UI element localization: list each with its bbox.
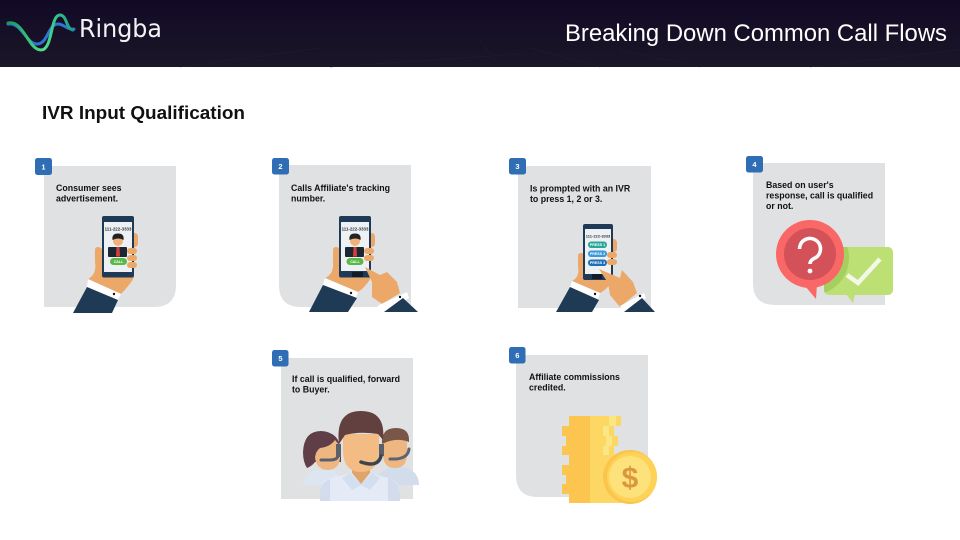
caption 3: Is prompted with an IVR: [530, 184, 631, 194]
badge 4: 4: [752, 160, 757, 169]
badge 4: [746, 156, 763, 172]
dollar coin: $: [622, 462, 639, 495]
badge 3: [509, 158, 526, 174]
caption 4: Based on user's: [766, 180, 834, 190]
badge 6: 6: [515, 351, 519, 360]
badge 2: [272, 158, 289, 174]
icon: red question speech bubble: [776, 220, 844, 299]
panel: step 4: [746, 156, 893, 305]
caption 4: response, call is qualified: [766, 190, 873, 200]
caption 6: Affiliate commissions: [529, 372, 620, 382]
panel: step 3: [509, 158, 655, 312]
badge 1: 1: [41, 162, 46, 172]
icon: two hands pressing IVR buttons on phone: [556, 224, 655, 312]
logo wordmark: Ringba: [79, 14, 162, 43]
caption 2: Calls Affiliate's tracking: [291, 183, 390, 193]
panel: step 1: [35, 158, 176, 313]
icon: Ringba wave logo: [8, 15, 74, 50]
header banner: [0, 0, 960, 67]
panel: step 5: [272, 350, 419, 501]
badge 2: 2: [278, 162, 283, 171]
icon: three call-centre agents with headsets: [303, 411, 419, 501]
icon: hand holding phone with call screen: CALL: [114, 260, 124, 264]
caption 4: or not.: [766, 201, 793, 211]
badge 6: [509, 347, 526, 364]
badge 3: 3: [515, 162, 520, 171]
caption 5: If call is qualified, forward: [292, 374, 400, 384]
icon: two hands dialing phone: 111-222-3333: [342, 226, 369, 232]
badge 5: 5: [278, 354, 283, 363]
badge 1: [35, 158, 52, 175]
badge 5: [272, 350, 288, 366]
icon: two hands dialing phone: CALL: [350, 260, 361, 264]
caption 1: advertisement.: [56, 193, 118, 203]
caption 1: Consumer sees: [56, 183, 122, 193]
header title: Breaking Down Common Call Flows: [565, 20, 947, 47]
icon: two hands pressing IVR buttons on phone: PRESS 3: [590, 261, 605, 265]
caption 5: to Buyer.: [292, 384, 330, 394]
icon: hand holding phone with call screen: 111-222-3333: [105, 226, 132, 232]
icon: green check speech bubble: [824, 247, 893, 303]
section heading: IVR Input Qualification: [42, 102, 245, 123]
icon: two hands dialing phone: [309, 216, 418, 312]
caption 2: number.: [291, 193, 325, 203]
icon: stack of gold coins with dollar coin: [562, 416, 657, 504]
panel: step 2: [272, 158, 418, 312]
caption 6: credited.: [529, 382, 566, 392]
panel: step 6: [509, 347, 657, 504]
icon: hand holding phone with call screen: [73, 216, 138, 313]
caption 3: to press 1, 2 or 3.: [530, 194, 602, 204]
icon: two hands pressing IVR buttons on phone: PRESS 2: [590, 252, 605, 256]
icon: two hands pressing IVR buttons on phone: 111-222-3333: [586, 234, 611, 238]
icon: two hands pressing IVR buttons on phone: PRESS 1: [590, 243, 605, 247]
